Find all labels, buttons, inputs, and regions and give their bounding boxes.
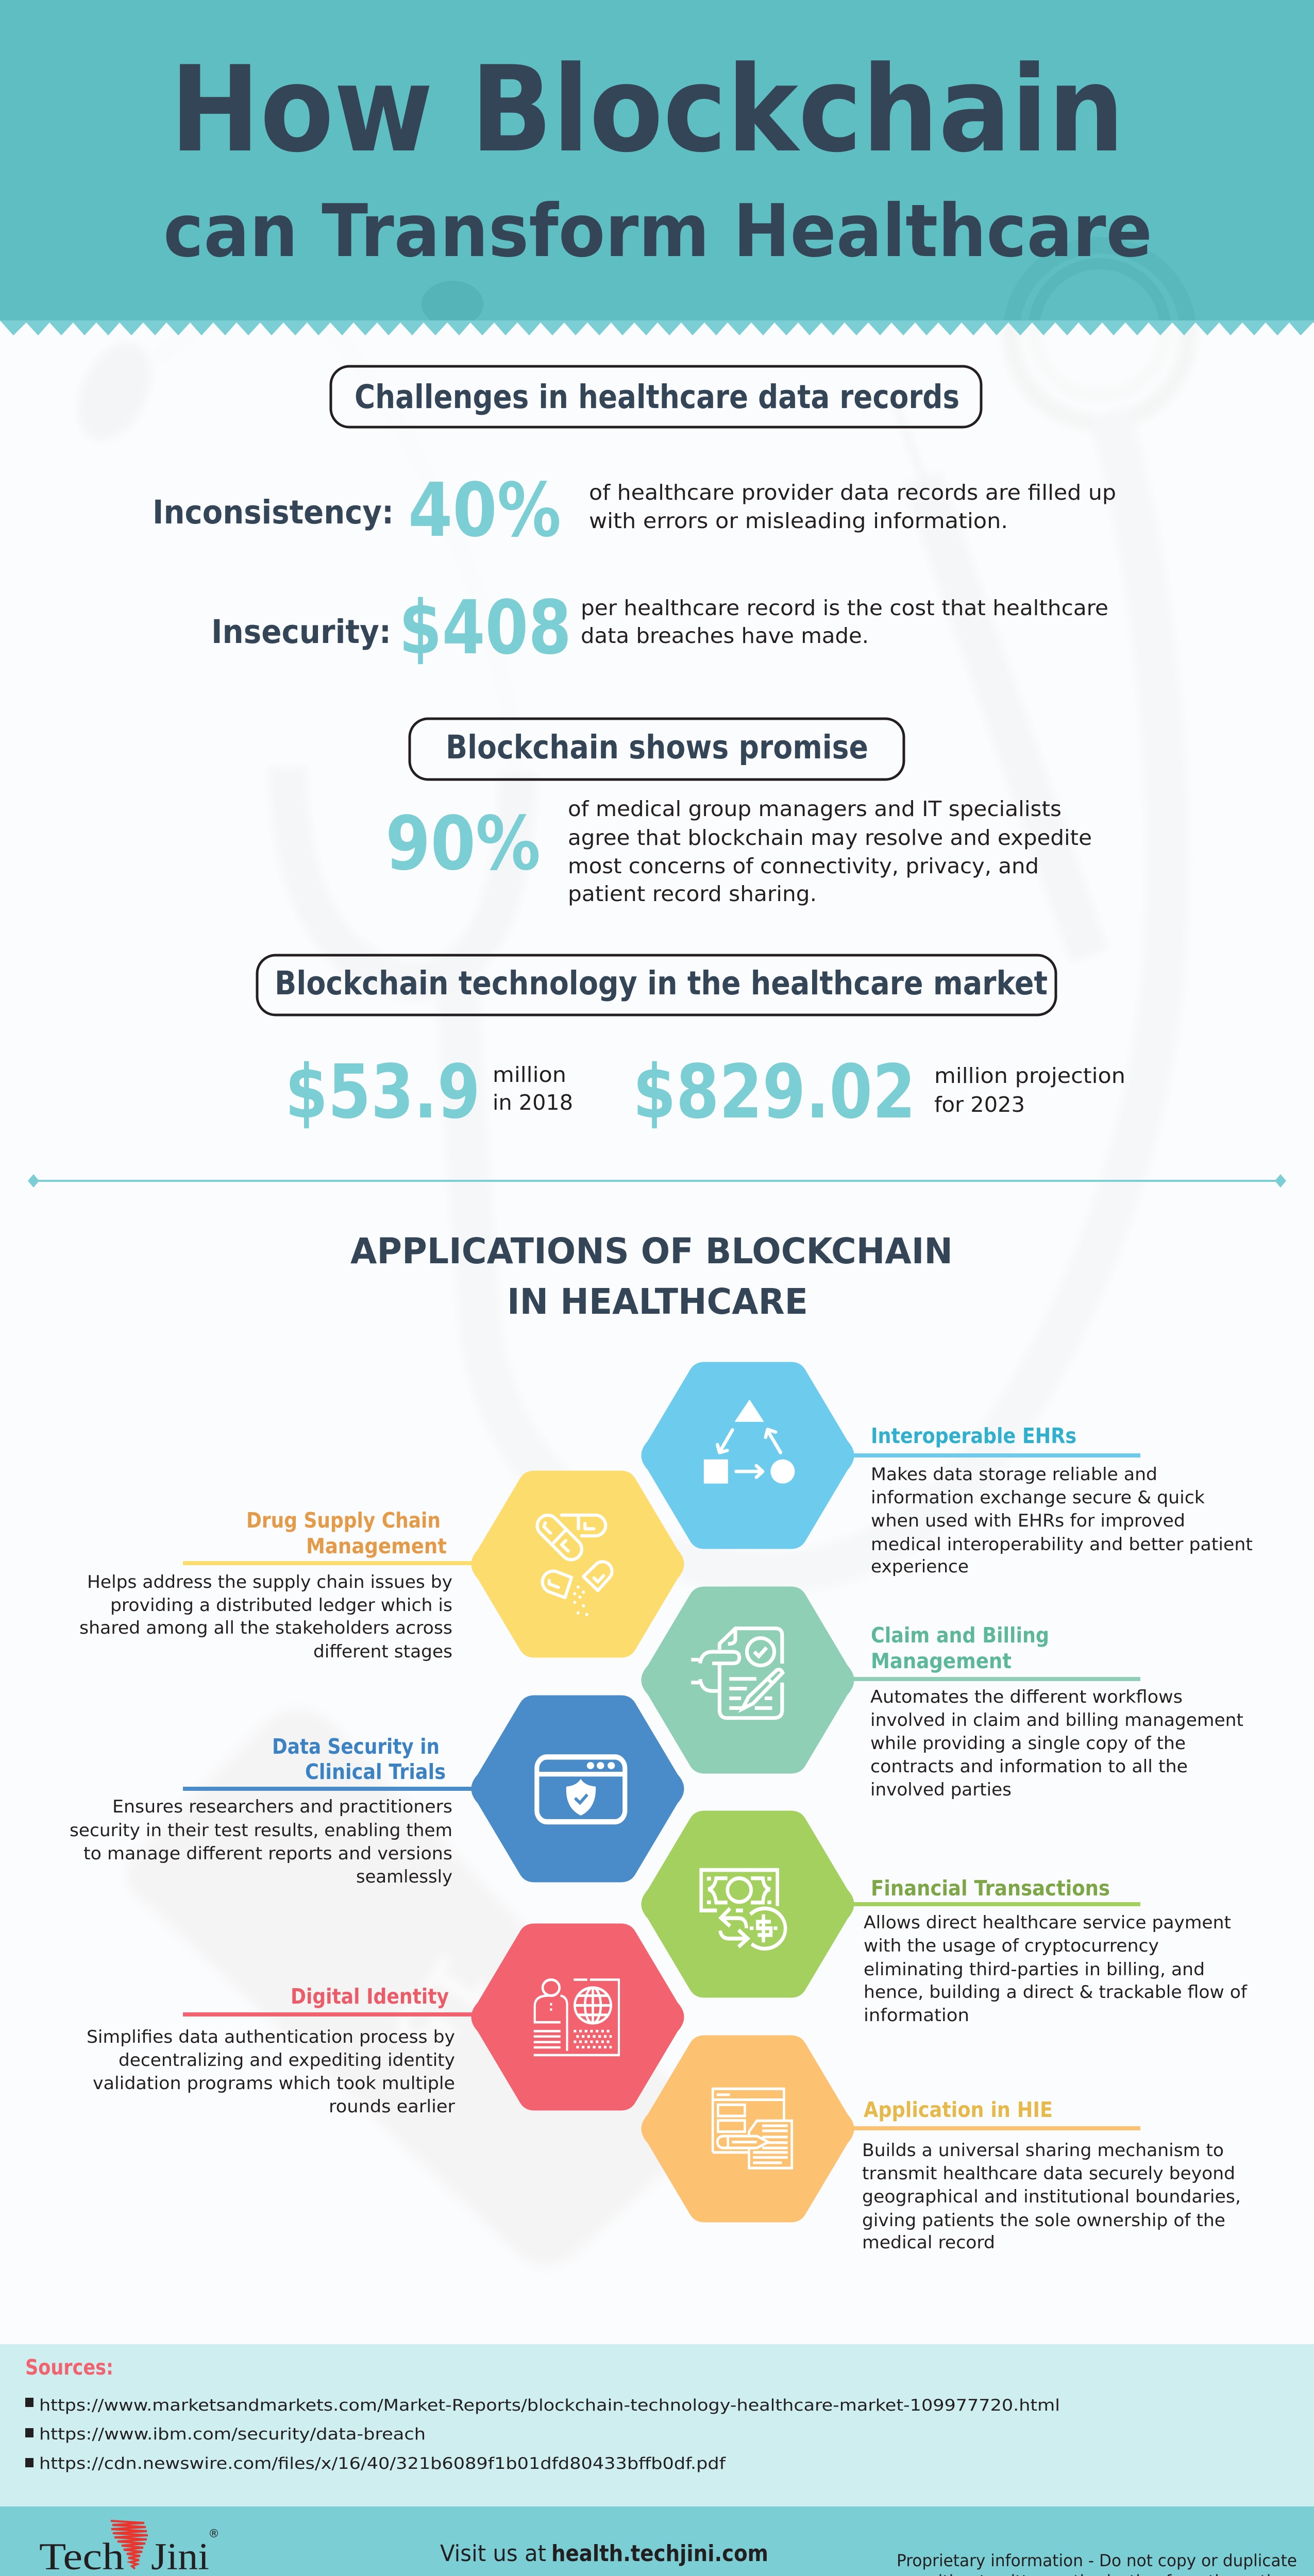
stat: insecurity $408: Insecurity: (211, 613, 391, 651)
stat: 90%: agree that blockchain may resolve and expedite (568, 825, 1092, 850)
block: application in HIE: transmit healthcare data securely beyond (862, 2163, 1235, 2184)
heading pill: challenges: Challenges in healthcare data records (355, 378, 959, 416)
block: drug supply chain: providing a distributed ledger which is (110, 1595, 452, 1616)
block: data security: seamlessly (356, 1867, 452, 1887)
block: application in HIE: Application in HIE (864, 2097, 1053, 2122)
sources panel: https://cdn.newswire.com/files/x/16/40/321b6089f1b01dfd80433bffb0df.pdf (39, 2454, 726, 2473)
icon: money and coin (701, 1870, 785, 1948)
stat: insecurity $408: data breaches have made. (581, 623, 869, 648)
block: financial transactions (864, 1876, 1248, 2026)
block: claim and billing: involved parties (870, 1780, 1012, 1800)
block: interoperable EHRs: Interoperable EHRs (871, 1423, 1076, 1448)
heading pill: market (257, 955, 1056, 1015)
background: faint stethoscope and phone photo (64, 245, 1188, 2266)
block: drug supply chain: Drug Supply Chain (246, 1508, 441, 1533)
stat: $829.02 million: for 2023 (934, 1092, 1025, 1117)
title (163, 41, 1152, 274)
stat: insecurity $408: per healthcare record is the cost that healthcare (581, 596, 1108, 620)
heading pill: market: Blockchain technology in the healthcare market (275, 964, 1048, 1002)
hexagon: digital identity (471, 1924, 684, 2110)
contact details: Visit us at (440, 2540, 546, 2567)
block: digital identity: Simplifies data authentication process by (87, 2027, 455, 2047)
icon: shapes cycle (704, 1399, 795, 1484)
block: claim and billing (870, 1623, 1243, 1800)
section heading: applications: IN HEALTHCARE (507, 1281, 808, 1323)
sources panel (0, 2344, 1314, 2506)
stat: inconsistency 40% (153, 467, 1116, 553)
block: data security: Clinical Trials (305, 1759, 446, 1784)
stat: $829.02 million: million projection (934, 1063, 1125, 1088)
stat: inconsistency 40%: with errors or misleading information. (589, 509, 1008, 533)
contact details: health.techjini.com (551, 2540, 768, 2567)
icon: secure browser (537, 1757, 625, 1822)
hexagon: drug supply chain (471, 1470, 684, 1658)
block: financial transactions: with the usage of cryptocurrency (864, 1936, 1159, 1956)
block: data security: Data Security in (272, 1734, 440, 1759)
block: claim and billing: Claim and Billing (871, 1623, 1049, 1648)
sources panel: Sources: (25, 2355, 113, 2380)
block: drug supply chain: shared among all the stakeholders across (79, 1618, 452, 1638)
stat: inconsistency 40%: of healthcare provider data records are filled up (589, 480, 1116, 505)
block: application in HIE: geographical and institutional boundaries, (862, 2187, 1241, 2207)
stat: 90%: patient record sharing. (568, 882, 817, 906)
stat: 90%: 90% (385, 800, 541, 887)
block: interoperable EHRs (871, 1423, 1253, 1577)
stat: insecurity $408 (211, 584, 1108, 671)
block: drug supply chain: different stages (313, 1641, 452, 1662)
block: interoperable EHRs: information exchange secure & quick (871, 1487, 1205, 1508)
block: digital identity: rounds earlier (329, 2096, 455, 2117)
block: digital identity: validation programs which took multiple (93, 2073, 455, 2094)
block: claim and billing: Management (871, 1649, 1012, 1673)
stat: inconsistency 40%: 40% (408, 467, 561, 553)
hexagon: claim and billing (641, 1587, 854, 1773)
sources panel: https://www.marketsandmarkets.com/Market-Reports/blockchain-technology-healthcare-market-109977720.html (39, 2396, 1060, 2415)
icon: pills (533, 1511, 612, 1616)
block: application in HIE: Builds a universal sharing mechanism to (862, 2140, 1224, 2161)
icon: passport identity (534, 1980, 619, 2055)
block: claim and billing: Automates the different workflows (870, 1687, 1183, 1707)
block: claim and billing: contracts and information to all the (870, 1756, 1188, 1777)
sources panel: https://www.ibm.com/security/data-breach (39, 2425, 426, 2444)
block: data security: Ensures researchers and practitioners (112, 1797, 452, 1817)
block: interoperable EHRs: medical interoperability and better patient (871, 1534, 1253, 1555)
block: interoperable EHRs: experience (871, 1556, 969, 1577)
logo: Tech Jini (39, 2521, 220, 2576)
block: data security (70, 1734, 452, 1887)
stat: inconsistency 40%: Inconsistency: (153, 494, 394, 531)
contact details (440, 2540, 781, 2576)
heading pill: blockchain shows promise: Blockchain shows promise (446, 728, 868, 766)
stat: 90% (385, 796, 1092, 906)
heading pill: blockchain shows promise (410, 719, 904, 779)
stat: $829.02 million (633, 1048, 1125, 1135)
hexagon: data security (471, 1695, 684, 1883)
block: financial transactions: Allows direct healthcare service payment (864, 1912, 1231, 1933)
block: application in HIE: medical record (862, 2232, 995, 2253)
icon: contract document (691, 1629, 783, 1718)
block: drug supply chain (79, 1508, 452, 1662)
hexagon: application in HIE (641, 2035, 854, 2223)
block: financial transactions: information (864, 2005, 969, 2026)
block: application in HIE: giving patients the sole ownership of the (862, 2210, 1225, 2231)
block: financial transactions: hence, building a direct & trackable flow of (864, 1982, 1248, 2003)
hexagon: interoperable EHRs (641, 1362, 854, 1549)
section heading: applications: APPLICATIONS OF BLOCKCHAIN (350, 1231, 953, 1272)
title: can Transform Healthcare (163, 189, 1152, 274)
background: faint stethoscope and phone photo: 15 (372, 1937, 507, 2076)
block: digital identity: decentralizing and expediting identity (119, 2050, 455, 2071)
stat: $829.02 million: $829.02 (633, 1048, 916, 1135)
block: interoperable EHRs: when used with EHRs for improved (871, 1511, 1185, 1531)
block: interoperable EHRs: Makes data storage reliable and (871, 1464, 1157, 1485)
stat: 90%: most concerns of connectivity, privacy, and (568, 854, 1039, 878)
block: claim and billing: involved in claim and billing management (870, 1710, 1243, 1731)
block: digital identity: Digital Identity (291, 1984, 449, 2009)
block: financial transactions: Financial Transactions (871, 1876, 1110, 1901)
icon: browser, form and pencil (713, 2089, 792, 2168)
stat: $53.9 million: $53.9 (285, 1048, 480, 1135)
title: How Blockchain (170, 41, 1124, 179)
stat: insecurity $408: $408 (399, 584, 571, 671)
block: claim and billing: while providing a single copy of the (870, 1733, 1186, 1754)
stat: 90%: of medical group managers and IT specialists (568, 796, 1062, 821)
section heading: applications (350, 1231, 953, 1323)
hexagon: financial transactions (641, 1810, 854, 1998)
block: financial transactions: eliminating third-parties in billing, and (864, 1959, 1205, 1980)
heading pill: challenges (331, 366, 981, 427)
block: data security: security in their test results, enabling them (70, 1820, 452, 1841)
block: data security: to manage different reports and versions (83, 1843, 452, 1864)
block: drug supply chain: Management (306, 1534, 447, 1558)
section divider (28, 1174, 1286, 1188)
connector lines (183, 1453, 1140, 2130)
proprietary notice: Proprietary information - Do not copy or duplicate (897, 2551, 1297, 2570)
footer panel (0, 2506, 1314, 2576)
block: digital identity (87, 1984, 455, 2117)
block: application in HIE (862, 2097, 1241, 2253)
block: drug supply chain: Helps address the supply chain issues by (87, 1572, 452, 1592)
stat: $53.9 million: million (493, 1062, 566, 1087)
stat: $53.9 million: in 2018 (493, 1090, 573, 1115)
header band (0, 0, 1314, 335)
logo: Tech Jini: ® (208, 2528, 220, 2540)
